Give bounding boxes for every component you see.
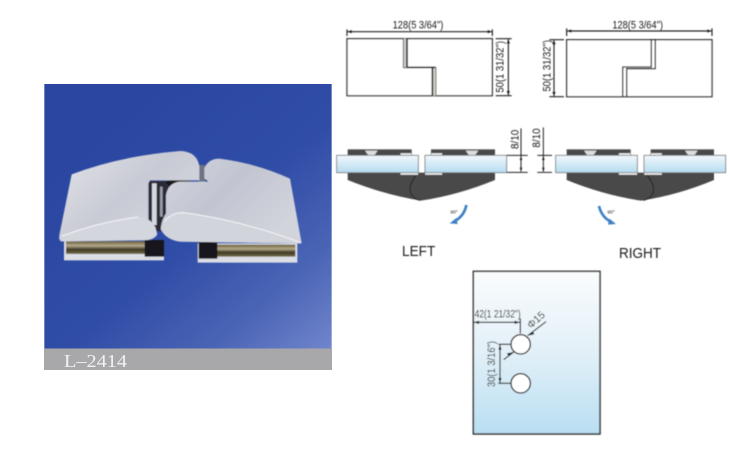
panel: top view right bbox=[542, 20, 712, 97]
white inserts bbox=[619, 153, 662, 175]
outline bbox=[347, 39, 492, 96]
panel: section view left: 8/10 bbox=[510, 130, 522, 149]
panel: top view left: 50(1 31/32") bbox=[495, 41, 507, 93]
panel: section view right: 8/10 bbox=[531, 128, 543, 148]
glass panel bbox=[473, 271, 600, 434]
panel: glass drilling diagram: 30(1 3/16") bbox=[486, 341, 498, 387]
panel: glass drilling diagram: 42(1 21/32") bbox=[475, 309, 521, 321]
central chrome pin bbox=[149, 181, 169, 231]
stepped joint bbox=[403, 39, 436, 96]
right clamp plate bbox=[198, 243, 297, 263]
stepped joint bbox=[623, 40, 655, 97]
screws bbox=[584, 151, 698, 155]
top plates bbox=[348, 149, 495, 155]
height dimension bbox=[496, 39, 512, 96]
width dimension bbox=[567, 28, 712, 36]
hinge body bbox=[567, 173, 714, 201]
panel: glass drilling diagram: Φ15 bbox=[526, 310, 548, 331]
panel: top view right: 50(1 31/32") bbox=[542, 40, 554, 92]
panel: section view left bbox=[337, 128, 528, 260]
panel: top view left: 128(5 3/64") bbox=[393, 20, 443, 32]
glass panes bbox=[556, 155, 637, 173]
rotation arrow: 90° bbox=[607, 210, 615, 216]
rotation arrow bbox=[450, 205, 466, 224]
screws bbox=[365, 151, 478, 155]
width dimension bbox=[347, 29, 492, 36]
right leaf bbox=[161, 159, 302, 243]
panel: section view right bbox=[531, 127, 726, 262]
panel: product photo bbox=[44, 84, 332, 349]
rotation arrow bbox=[599, 206, 616, 225]
horizontal dimension bbox=[474, 318, 520, 333]
holes bbox=[511, 335, 530, 354]
left clamp plate bbox=[64, 241, 164, 260]
caption bar bbox=[44, 348, 332, 371]
rotation arrow: 90° bbox=[450, 210, 458, 216]
photo background bbox=[44, 84, 332, 349]
panel: top view right: 128(5 3/64") bbox=[612, 20, 663, 32]
left leaf bbox=[59, 151, 199, 241]
height dimension bbox=[549, 40, 564, 97]
white inserts bbox=[400, 153, 442, 175]
vertical dimension bbox=[498, 344, 510, 383]
LEFT label: LEFT bbox=[402, 244, 435, 260]
thickness dimension bbox=[537, 127, 552, 172]
hinge photo bbox=[59, 151, 302, 263]
thickness dimension bbox=[507, 128, 528, 172]
RIGHT label: RIGHT bbox=[619, 246, 661, 262]
hinge body bbox=[348, 173, 495, 201]
panel: top view left bbox=[347, 20, 512, 96]
panel: glass drilling diagram bbox=[473, 271, 600, 434]
top plates bbox=[567, 149, 714, 155]
caption text: L–2414 bbox=[64, 351, 127, 371]
outline bbox=[567, 40, 712, 97]
diameter dimension bbox=[504, 322, 546, 360]
glass panes bbox=[337, 155, 418, 173]
